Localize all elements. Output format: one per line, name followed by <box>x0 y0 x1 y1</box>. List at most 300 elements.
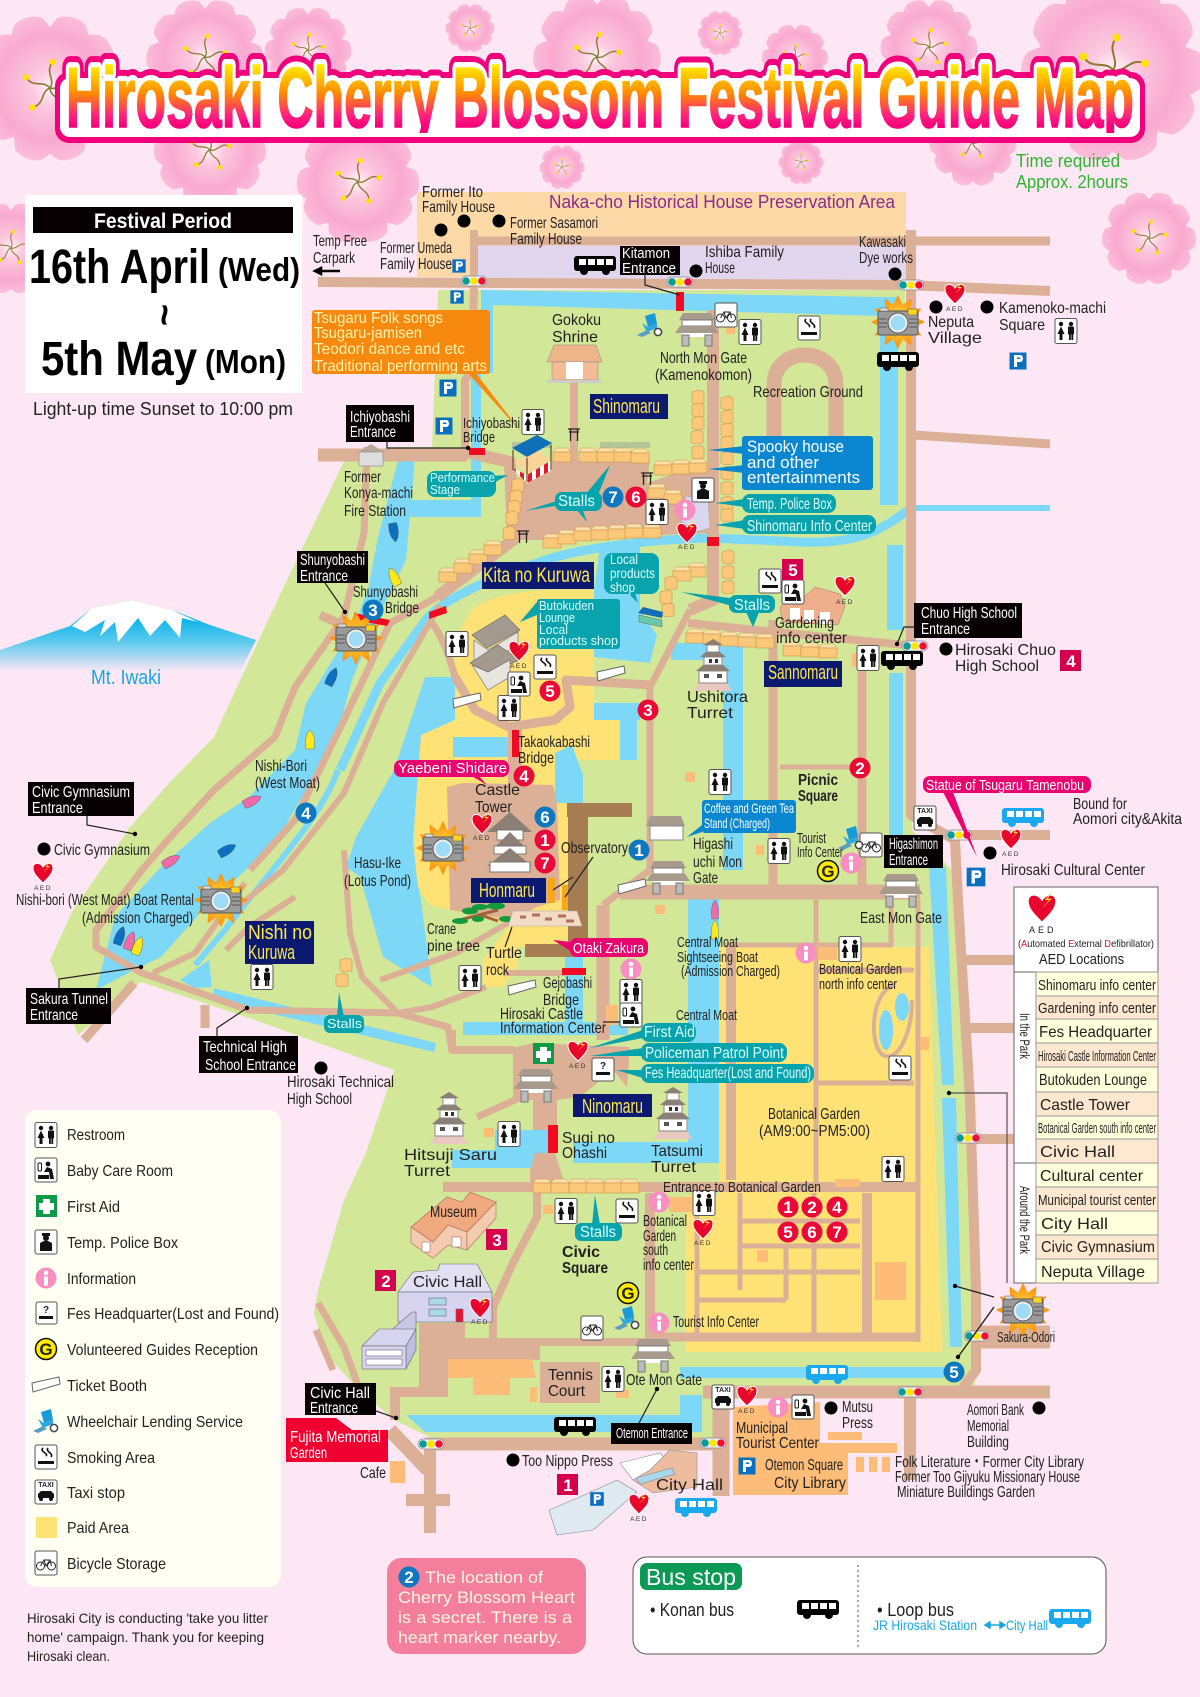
butokuden lounge building <box>470 615 520 690</box>
place names: south area <box>413 1204 1084 1501</box>
place names: south area: Building <box>967 1434 1009 1451</box>
aed markers: AED <box>678 544 696 551</box>
district labels navy: Honmaru <box>479 880 535 902</box>
place names: castle area: rock <box>486 962 510 979</box>
teal callouts: Local <box>610 551 638 567</box>
place names: north area: Shunyobashi <box>353 584 418 601</box>
place names: south area: Too Nippo Press <box>522 1453 613 1470</box>
stalls <box>336 390 837 1193</box>
entrance labels: Technical High <box>203 1039 287 1056</box>
place names: north area: Former <box>344 469 381 486</box>
AED locations table: Around the Park <box>1017 1186 1033 1255</box>
crane pine tree <box>452 902 513 924</box>
place names: north area: Former Sasamori <box>510 215 598 232</box>
red numbered markers: 7 <box>832 1223 842 1242</box>
shinomaru info center building <box>680 496 710 532</box>
litter campaign note: home' campaign. Thank you for keeping <box>27 1629 264 1645</box>
place names: east area: Bound for <box>1073 796 1128 813</box>
place names: north area: Konya-machi <box>344 485 413 502</box>
district labels navy: Ninomaru <box>582 1096 643 1118</box>
teal callouts: Local <box>539 622 568 637</box>
road network <box>84 230 1050 1533</box>
legend panel: Temp. Police Box <box>67 1235 178 1252</box>
AED locations table: Civic Gymnasium <box>1041 1239 1155 1256</box>
torii gates <box>517 429 653 543</box>
blue callouts: Spooky house <box>747 437 844 456</box>
bicycle storage <box>581 303 882 1340</box>
red numbered markers: 2 <box>807 1198 817 1217</box>
place names: north area: (Kamenokomon) <box>655 367 752 384</box>
place names: east area: Sakura-Odori <box>997 1329 1055 1346</box>
volunteer guide receptions: G <box>621 1284 635 1303</box>
place names: castle area: Crane <box>427 921 456 938</box>
red numbered markers: 1 <box>540 831 550 850</box>
aed markers <box>33 281 1021 1523</box>
AED locations table: Neputa Village <box>1041 1264 1145 1281</box>
blue buses <box>675 808 1044 1517</box>
entrance labels: Entrance <box>310 1400 358 1417</box>
entrance labels: Entrance <box>350 424 396 441</box>
temporary police box icon <box>692 478 714 502</box>
AED locations table: Shinomaru info center <box>1038 977 1156 994</box>
place names: north area: Square <box>999 317 1045 334</box>
fujita memorial garden label: Fujita Memorial <box>290 1429 381 1446</box>
red numbered markers: 6 <box>807 1223 817 1242</box>
legend panel: Ticket Booth <box>67 1378 147 1395</box>
teal callouts: Stalls <box>734 597 770 614</box>
place names: central moat and botanical garden: (AM9:00~PM5:00) <box>759 1123 870 1140</box>
place names: south area: Former Too Gijyuku Missionary House <box>895 1469 1080 1486</box>
observatory rest house <box>646 816 685 840</box>
cherry blossom heart note: heart marker nearby. <box>398 1628 561 1647</box>
district labels navy: Shinomaru <box>593 396 660 418</box>
legend panel: Fes Headquarter(Lost and Found) <box>67 1306 279 1323</box>
crimson square numbers: 5 <box>788 561 798 580</box>
information points <box>620 500 862 1418</box>
moats and ponds <box>96 290 1050 1432</box>
teal callouts: First Aid <box>644 1024 695 1041</box>
place names: central moat and botanical garden: Central Moat <box>676 1007 738 1024</box>
entrance labels: Higashimon <box>889 836 938 853</box>
district labels navy: Kita no Kuruwa <box>483 564 590 587</box>
place names: north area: Kawasaki <box>859 234 906 251</box>
AED locations table: In the Park <box>1017 1013 1033 1060</box>
AED locations table <box>1014 887 1158 1283</box>
place names: south area: Tennis <box>548 1367 593 1384</box>
red numbered markers: 5 <box>783 1223 793 1242</box>
teal callouts: products shop <box>539 633 618 648</box>
taxi stops: TAXI <box>917 808 933 815</box>
legend panel: Bicycle Storage <box>67 1556 166 1573</box>
cherry blossom heart note <box>387 1558 586 1654</box>
place names: central moat and botanical garden: Tatsumi <box>651 1143 703 1160</box>
place names: west area: (Lotus Pond) <box>344 873 411 890</box>
aed markers: AED <box>630 1516 648 1523</box>
paid areas in yellow <box>413 590 942 1352</box>
place names: south area: Civic <box>562 1244 600 1261</box>
festival period panel: (Mon) <box>205 343 286 380</box>
place names: east area: East Mon Gate <box>860 910 942 927</box>
teal callouts: Performance <box>430 470 495 485</box>
aed markers: AED <box>510 663 528 670</box>
place names: north area <box>313 184 1106 617</box>
castle tower <box>487 812 532 872</box>
entrance labels: Entrance <box>30 1007 78 1024</box>
place names: east area: Hirosaki Chuo <box>955 642 1056 659</box>
gardening info center building <box>780 587 845 625</box>
place names: castle area: Bridge <box>543 992 579 1009</box>
place names: north area: Gokoku <box>552 312 601 329</box>
place names: west area: Civic Gymnasium <box>54 842 150 859</box>
crimson square numbers: 3 <box>492 1231 502 1250</box>
place names: central moat and botanical garden: north info center <box>819 976 897 993</box>
teal callouts: Temp. Police Box <box>747 496 832 513</box>
entrance labels: Kitamon <box>622 245 670 262</box>
legend panel: Wheelchair Lending Service <box>67 1414 243 1431</box>
place names: north area: Carpark <box>313 250 356 267</box>
aed markers: AED <box>34 885 52 892</box>
legend panel: ? <box>43 1305 49 1316</box>
place names: castle area: Tower <box>475 799 513 816</box>
parking signs <box>436 259 1026 1506</box>
cherry blossom heart note: 2 <box>404 1568 414 1587</box>
red numbered markers: 7 <box>540 854 550 873</box>
teal callouts: Stalls <box>327 1016 363 1031</box>
AED locations table: Fes Headquarter <box>1039 1024 1153 1041</box>
teal callouts: Stalls <box>580 1224 616 1241</box>
teal callouts: Lounge <box>539 610 575 625</box>
teal callouts: Butokuden <box>539 598 594 613</box>
park land <box>50 290 978 1440</box>
place names: north area: Former Umeda <box>380 240 452 257</box>
blue numbered markers: 5 <box>949 1363 959 1382</box>
place names: south area: City Hall <box>656 1477 723 1494</box>
blue callouts <box>687 436 873 837</box>
turtle rock stones <box>508 911 582 926</box>
place names: castle area: Information Center <box>500 1020 607 1037</box>
place names: east area: Hirosaki Cultural Center <box>1001 862 1146 879</box>
taxi stops <box>712 806 936 1409</box>
red numbered markers <box>514 486 870 1242</box>
bus stop legend panel: City Hall <box>1006 1617 1048 1633</box>
aed markers: AED <box>1002 851 1020 858</box>
civic hall building <box>362 1264 492 1369</box>
entrance labels: School Entrance <box>205 1057 296 1074</box>
bus stop legend panel: Bus stop <box>646 1564 736 1590</box>
district labels navy: Sannomaru <box>768 662 838 684</box>
turrets <box>430 639 732 1144</box>
place names: west area: High School <box>287 1091 352 1108</box>
place names: south area: Folk Literature・Former City Library <box>895 1454 1084 1471</box>
legend panel: Smoking Area <box>67 1450 155 1467</box>
gates <box>514 313 923 1372</box>
legend panel: First Aid <box>67 1199 120 1216</box>
place names: south area: Ote Mon Gate <box>626 1372 702 1389</box>
place names: castle area: Ushitora <box>687 689 748 706</box>
place names: central moat and botanical garden <box>404 934 902 1274</box>
place names: castle area: Info Center <box>797 844 843 861</box>
district labels navy <box>245 394 842 1118</box>
place names: central moat and botanical garden: Sugi no <box>562 1130 615 1147</box>
fes headquarters icon: ? <box>600 1061 606 1072</box>
teal callouts: Stage <box>430 482 460 497</box>
callout: folk songs: Tsugaru-jamisen <box>314 325 422 342</box>
legend panel: Taxi stop <box>67 1485 125 1502</box>
black buses <box>554 256 923 1436</box>
place names: north area: Former Ito <box>422 184 483 201</box>
aed markers: AED <box>694 1240 712 1247</box>
place names: central moat and botanical garden: Botanical Garden <box>819 961 902 978</box>
time required note <box>1016 151 1128 192</box>
teal callouts <box>324 465 876 1241</box>
aed markers: AED <box>473 835 491 842</box>
festival period panel: (Wed) <box>218 251 300 288</box>
smoking areas <box>534 316 911 1223</box>
volunteer guide receptions <box>618 860 838 1304</box>
festival period panel: 5th May <box>41 333 197 386</box>
time required note: Approx. 2hours <box>1016 172 1128 192</box>
place names: north area: Ichiyobashi <box>463 415 520 432</box>
place names: north area: Family House <box>510 231 582 248</box>
place names: south area: Civic Hall <box>413 1274 482 1291</box>
blue numbered markers <box>296 486 964 1382</box>
place names: castle area: info center <box>776 630 848 647</box>
AED locations table: (Automated External Defibrillator) <box>1018 938 1154 950</box>
place names: east area: High School <box>955 658 1039 675</box>
callout: folk songs: Tsugaru Folk songs <box>314 310 443 327</box>
place names: central moat and botanical garden: Botanical <box>643 1213 687 1230</box>
place names: south area: Press <box>842 1415 873 1432</box>
blue numbered markers: 3 <box>368 601 378 620</box>
place names: south area: Court <box>548 1383 586 1400</box>
place names: north area: Fire Station <box>344 503 406 520</box>
AED locations table: City Hall <box>1041 1216 1108 1233</box>
entrance labels: Civic Gymnasium <box>32 784 130 801</box>
performance stage <box>512 435 552 483</box>
cameras: photo spots <box>194 295 1050 1337</box>
place names: castle area: Takaokabashi <box>518 734 590 751</box>
taxi stops: TAXI <box>715 1387 731 1394</box>
preservation area band <box>417 192 906 280</box>
red numbered markers: 4 <box>832 1198 842 1217</box>
festival period panel: 16th April <box>29 241 210 294</box>
fujita memorial garden label <box>286 1418 388 1462</box>
place names: west area: Hirosaki Technical <box>287 1074 394 1091</box>
fire station building <box>358 444 384 466</box>
city hall complex <box>549 1450 697 1535</box>
place names: north area: Village <box>928 330 982 347</box>
place names: north area: Ishiba Family <box>705 244 784 261</box>
place names: east area <box>860 642 1182 1346</box>
bridges in red <box>354 292 719 1153</box>
place names: castle area: Square <box>798 788 838 805</box>
volunteer guide receptions: G <box>821 862 835 881</box>
legend panel: Restroom <box>67 1127 125 1144</box>
callout: folk songs <box>312 310 522 433</box>
teal callouts: shop <box>610 579 635 595</box>
place names: castle area: pine tree <box>427 938 480 955</box>
festival period panel <box>25 195 302 393</box>
entrance labels: Entrance <box>889 852 928 869</box>
AED locations table: Castle Tower <box>1040 1097 1131 1114</box>
wheelchair lending <box>614 313 863 1330</box>
callout: folk songs: Teodori dance and etc <box>314 341 465 358</box>
place names: central moat and botanical garden: Garden <box>643 1228 676 1245</box>
blue callouts: Coffee and Green Tea <box>704 800 794 816</box>
landmark dots <box>38 214 1046 1466</box>
entrance labels: Ichiyobashi <box>350 409 410 426</box>
place names: south area: Tourist Center <box>736 1435 820 1452</box>
crimson square numbers: 1 <box>563 1476 573 1495</box>
legend panel <box>25 1110 281 1587</box>
bus stop legend panel: • Loop bus <box>877 1600 954 1620</box>
entrance labels: Otemon Entrance <box>616 1425 688 1442</box>
place names: central moat and botanical garden: Sightseeing Boat <box>677 949 759 966</box>
blue numbered markers: 4 <box>301 804 311 823</box>
legend panel: Information <box>67 1271 136 1288</box>
place names: castle area: Higashi <box>693 836 733 853</box>
boats <box>113 522 719 956</box>
place names: south area: Municipal <box>736 1420 788 1437</box>
teal callouts: Shinomaru Info Center <box>747 518 873 535</box>
place names: central moat and botanical garden: Botanical Garden <box>768 1106 860 1123</box>
place names: central moat and botanical garden: south <box>643 1242 668 1259</box>
fujita memorial garden label: Garden <box>290 1445 327 1462</box>
AED locations table: Butokuden Lounge <box>1039 1072 1147 1089</box>
first aid cross <box>533 1043 554 1064</box>
place names: west area: Nishi-Bori <box>255 758 307 775</box>
teal callouts: Fes Headquarter(Lost and Found) <box>645 1065 811 1082</box>
pink callouts: Statue of Tsugaru Tamenobu <box>926 777 1084 794</box>
place names: north area: Bridge <box>463 429 495 446</box>
place names: castle area: Castle <box>475 782 520 799</box>
place names: castle area: Gate <box>693 870 718 887</box>
red numbered markers: 3 <box>643 701 653 720</box>
litter campaign note: Hirosaki clean. <box>27 1648 110 1664</box>
bus stop legend panel: JR Hirosaki Station <box>873 1617 977 1633</box>
teal callouts: Stalls <box>558 493 595 510</box>
crimson square numbers: 2 <box>381 1272 391 1291</box>
legend panel: TAXI <box>38 1482 54 1489</box>
litter campaign note: Hirosaki City is conducting 'take you litter <box>27 1610 268 1626</box>
AED locations table: Civic Hall <box>1040 1144 1115 1161</box>
bus stop legend panel <box>633 1557 1106 1654</box>
place names: castle area <box>427 615 848 1037</box>
place names: north area: Kamenoko-machi <box>999 300 1106 317</box>
orange patches and brown observatory path <box>390 325 929 1495</box>
place names: north area: Family House <box>422 199 495 216</box>
entrance labels: Civic Hall <box>310 1385 370 1402</box>
gokoku shrine <box>547 345 602 383</box>
legend panel: Volunteered Guides Reception <box>67 1342 258 1359</box>
place names: south area: Museum <box>430 1204 477 1221</box>
place names: north area: Recreation Ground <box>753 384 863 401</box>
blue numbered markers: 1 <box>634 841 644 860</box>
place names: west area <box>16 758 411 1482</box>
AED locations table: Cultural center <box>1040 1168 1144 1185</box>
restrooms <box>251 318 1077 1392</box>
area title: Naka-cho: Naka-cho Historical House Preservation Area <box>549 192 896 212</box>
callout: folk songs: Traditional performing arts <box>314 358 487 375</box>
Mt. Iwaki illustration: Mt. Iwaki <box>91 667 161 689</box>
place names: north area: Neputa <box>928 314 974 331</box>
place names: castle area: Turret <box>687 705 734 722</box>
fes headquarters icon <box>592 1058 614 1081</box>
aed markers: AED <box>471 1319 489 1326</box>
blue callouts: and other <box>747 453 819 472</box>
red numbered markers: 4 <box>519 767 529 786</box>
museum building <box>411 1192 496 1258</box>
place names: west area: (West Moat) <box>255 775 320 792</box>
place names: west area: (Admission Charged) <box>82 910 193 927</box>
AED locations table: AED <box>1029 925 1057 935</box>
place names: south area: Miniature Buildings Garden <box>897 1484 1035 1501</box>
aed markers: AED <box>738 1408 756 1415</box>
aed markers: AED <box>946 306 964 313</box>
cherry blossom heart note: The location of <box>425 1568 543 1587</box>
pink callouts: Otaki Zakura <box>573 940 645 957</box>
place names: north area: Dye works <box>859 250 913 267</box>
blue callouts: Stand (Charged) <box>704 815 770 831</box>
red numbered markers: 1 <box>783 1198 793 1217</box>
place names: central moat and botanical garden: info center <box>643 1257 694 1274</box>
legend panel: Paid Area <box>67 1520 129 1537</box>
Mt. Iwaki illustration <box>0 600 256 689</box>
cherry blossom heart note: is a secret. There is a <box>398 1608 573 1627</box>
place names: central moat and botanical garden: Entrance to Botanical Garden <box>663 1179 821 1196</box>
legend panel: G <box>39 1340 53 1359</box>
light-up time: Light-up time Sunset to 10:00 pm <box>33 399 293 419</box>
place names: south area: Memorial <box>967 1418 1009 1435</box>
entrance labels: Shunyobashi <box>300 552 365 569</box>
ticket booths <box>453 666 646 995</box>
place names: central moat and botanical garden: (Admission Charged) <box>681 963 780 980</box>
district labels navy: Kuruwa <box>248 942 296 964</box>
AED locations table: AED Locations <box>1039 951 1124 968</box>
bus stop legend panel: • Konan bus <box>650 1600 734 1620</box>
baby care rooms <box>508 580 814 1419</box>
district labels navy: Nishi no <box>248 922 312 944</box>
entrance labels <box>26 245 1022 1444</box>
aed markers: AED <box>569 1063 587 1070</box>
cherry blossoms decoration <box>0 0 1200 298</box>
festival period panel: Festival Period <box>94 210 232 233</box>
local products shop building <box>638 607 663 627</box>
place names: castle area: Bridge <box>518 750 554 767</box>
place names: north area: House <box>705 260 735 277</box>
place names: central moat and botanical garden: Turret <box>404 1163 451 1180</box>
place names: castle area: Gardening <box>775 615 834 632</box>
festival period panel: ~ <box>143 304 185 326</box>
pink callouts <box>394 760 1091 957</box>
leader lines <box>59 268 1007 1423</box>
red numbered markers: 6 <box>631 488 641 507</box>
place names: north area: Family House <box>380 256 452 273</box>
litter campaign note <box>27 1610 268 1664</box>
crimson square numbers <box>375 559 1081 1495</box>
place names: west area: Hasu-Ike <box>354 855 401 872</box>
place names: castle area: uchi Mon <box>693 854 742 871</box>
place names: west area: Cafe <box>360 1465 386 1482</box>
place names: north area: Shrine <box>552 329 598 346</box>
fence behind stalls <box>512 442 650 448</box>
place names: south area: Square <box>562 1260 608 1277</box>
place names: central moat and botanical garden: Hitsuji Saru <box>404 1147 497 1164</box>
place names: north area: Bridge <box>385 600 419 617</box>
red numbered markers: 5 <box>545 682 555 701</box>
place names: castle area: Gejobashi <box>543 975 592 992</box>
place names: central moat and botanical garden: Central Moat <box>677 934 739 951</box>
